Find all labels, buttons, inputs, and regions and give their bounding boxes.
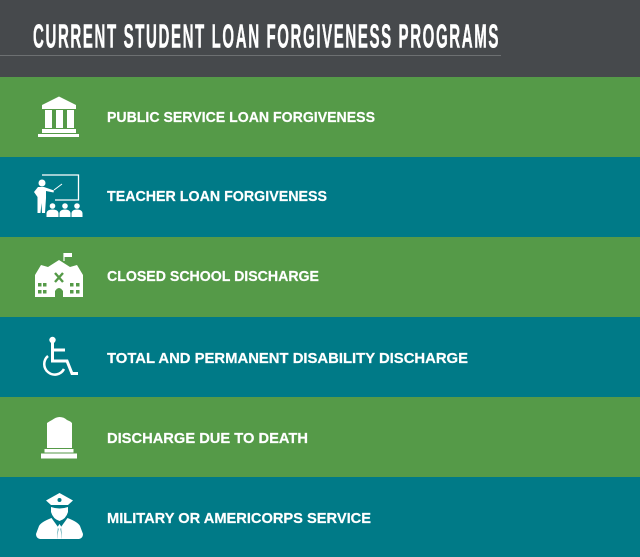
- icon: closed school: [35, 253, 83, 297]
- label: teacher loan forgiveness: TEACHER LOAN FORGIVENESS: [107, 188, 327, 205]
- panel: total and permanent disability discharge: [0, 317, 640, 397]
- panel: closed school discharge: [0, 237, 640, 317]
- icon: military officer: [36, 493, 83, 539]
- icon: wheelchair: [44, 337, 78, 375]
- icon: teacher at board: [34, 175, 82, 217]
- panel: military or americorps service: [0, 477, 640, 557]
- panel: discharge due to death: [0, 397, 640, 477]
- panel: public service loan forgiveness: [0, 77, 640, 157]
- label: closed school discharge: CLOSED SCHOOL DISCHARGE: [107, 268, 319, 285]
- label: discharge due to death: DISCHARGE DUE TO DEATH: [107, 430, 308, 447]
- icon: government building: [38, 96, 79, 137]
- label: military or americorps service: MILITARY OR AMERICORPS SERVICE: [107, 510, 371, 527]
- panel: teacher loan forgiveness: [0, 157, 640, 237]
- label: total and permanent disability discharge: TOTAL AND PERMANENT DISABILITY DISCHARGE: [107, 350, 468, 367]
- mark: X: [55, 273, 63, 282]
- icon: tombstone: [41, 417, 77, 458]
- label: public service loan forgiveness: PUBLIC SERVICE LOAN FORGIVENESS: [107, 109, 375, 126]
